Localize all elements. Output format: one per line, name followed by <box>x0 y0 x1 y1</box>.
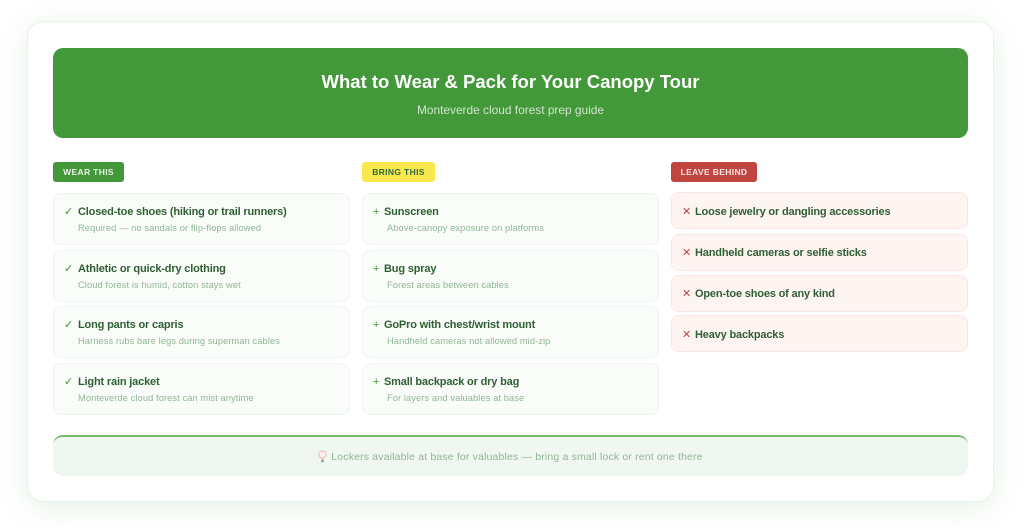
item: handheld cameras <box>671 234 968 271</box>
item: gopro: GoPro with chest/wrist mount <box>384 319 535 331</box>
column tag: wear this <box>53 162 124 182</box>
column tag: wear this: WEAR THIS <box>63 167 114 177</box>
item: rain jacket: ✓ <box>64 376 73 388</box>
title: What to Wear & Pack for Your Canopy Tour <box>322 71 699 92</box>
item: gopro: Handheld cameras not allowed mid-zip <box>387 336 550 346</box>
item: rain jacket: Monteverde cloud forest can mist anytime <box>78 393 254 403</box>
item: sunscreen: Sunscreen <box>384 206 439 218</box>
item: sunscreen: Above-canopy exposure on platforms <box>387 223 544 233</box>
item: small backpack <box>362 363 659 415</box>
item: loose jewelry <box>671 192 968 229</box>
subtitle: Monteverde cloud forest prep guide <box>417 103 604 117</box>
item: closed-toe shoes: Closed-toe shoes (hiking or trail runners) <box>78 206 287 218</box>
item: closed-toe shoes: Required — no sandals or flip-flops allowed <box>78 223 261 233</box>
item: closed-toe shoes <box>53 193 350 245</box>
item: long pants: Long pants or capris <box>78 319 183 331</box>
column tag: leave behind <box>671 162 757 182</box>
item: handheld cameras: Handheld cameras or selfie sticks <box>695 247 867 259</box>
column tag: leave behind: LEAVE BEHIND <box>681 167 747 177</box>
icon: light bulb <box>318 450 326 462</box>
item: athletic clothing: Cloud forest is humid, cotton stays wet <box>78 280 241 290</box>
item: bug spray: + <box>373 263 379 275</box>
item: athletic clothing: Athletic or quick-dry clothing <box>78 263 226 275</box>
item: bug spray <box>362 250 659 302</box>
item: small backpack: + <box>373 376 379 388</box>
item: athletic clothing <box>53 250 350 302</box>
item: small backpack: Small backpack or dry bag <box>384 376 519 388</box>
item: athletic clothing: ✓ <box>64 263 73 275</box>
item: bug spray: Bug spray <box>384 263 436 275</box>
item: sunscreen: + <box>373 206 379 218</box>
item: bug spray: Forest areas between cables <box>387 280 509 290</box>
item: sunscreen <box>362 193 659 245</box>
item: long pants: Harness rubs bare legs during superman cables <box>78 336 280 346</box>
header banner <box>53 48 968 138</box>
item: loose jewelry: ✕ <box>682 206 691 218</box>
item: small backpack: For layers and valuables at base <box>387 393 524 403</box>
item: open-toe shoes <box>671 275 968 312</box>
item: open-toe shoes: Open-toe shoes of any kind <box>695 288 835 300</box>
item: gopro <box>362 306 659 358</box>
item: closed-toe shoes: ✓ <box>64 206 73 218</box>
column tag: bring this <box>362 162 435 182</box>
column tag: bring this: BRING THIS <box>372 167 425 177</box>
item: heavy backpacks <box>671 315 968 352</box>
item: loose jewelry: Loose jewelry or dangling accessories <box>695 206 890 218</box>
item: long pants <box>53 306 350 358</box>
item: long pants: ✓ <box>64 319 73 331</box>
item: open-toe shoes: ✕ <box>682 288 691 300</box>
tip callout: Lockers available at base for valuables — bring a small lock or rent one there <box>331 451 703 463</box>
item: heavy backpacks: Heavy backpacks <box>695 329 784 341</box>
tip callout <box>53 435 968 476</box>
item: rain jacket: Light rain jacket <box>78 376 159 388</box>
item: rain jacket <box>53 363 350 415</box>
item: heavy backpacks: ✕ <box>682 329 691 341</box>
item: gopro: + <box>373 319 379 331</box>
item: handheld cameras: ✕ <box>682 247 691 259</box>
